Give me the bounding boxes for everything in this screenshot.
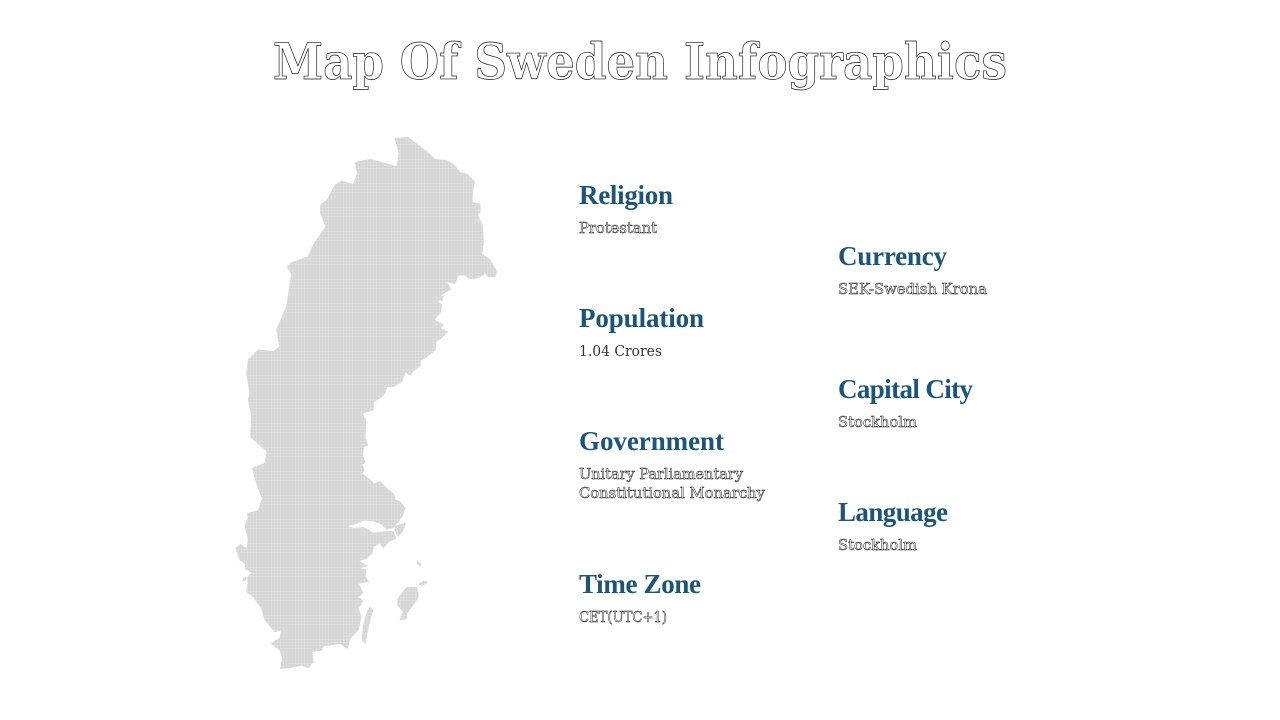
block: population: 1.04 Crores <box>579 342 662 360</box>
block: government: Government <box>579 426 724 456</box>
block: language <box>838 497 948 554</box>
block: capital city: Capital City <box>838 374 974 404</box>
block: population: Population <box>579 303 704 333</box>
block: language: Stockholm <box>838 536 917 554</box>
block: language: Language <box>838 497 948 527</box>
map of Sweden <box>236 137 497 668</box>
island: Oland <box>362 607 373 643</box>
island: Stockholm archipelago <box>395 523 405 536</box>
block: currency <box>838 241 987 298</box>
block: government <box>579 426 766 502</box>
block: government: Constitutional Monarchy <box>579 484 766 502</box>
block: currency: Currency <box>838 241 948 271</box>
island: Gotland <box>398 587 418 620</box>
block: time zone <box>579 569 701 626</box>
block: time zone: Time Zone <box>579 569 701 599</box>
block: currency: SEK-Swedish Krona <box>838 280 987 298</box>
title: Map Of Sweden Infographics <box>273 32 1007 91</box>
block: government: Unitary Parliamentary <box>579 465 743 483</box>
block: religion: Protestant <box>579 219 657 237</box>
island: west coast <box>243 578 246 581</box>
block: time zone: CET(UTC+1) <box>579 608 667 626</box>
island: Faro <box>419 581 427 586</box>
block: religion <box>579 180 673 237</box>
block: religion: Religion <box>579 180 673 210</box>
block: capital city <box>838 374 974 431</box>
island: Gotska Sandon <box>417 562 421 566</box>
mainland <box>236 137 497 668</box>
block: capital city: Stockholm <box>838 413 917 431</box>
block: population <box>579 303 704 360</box>
